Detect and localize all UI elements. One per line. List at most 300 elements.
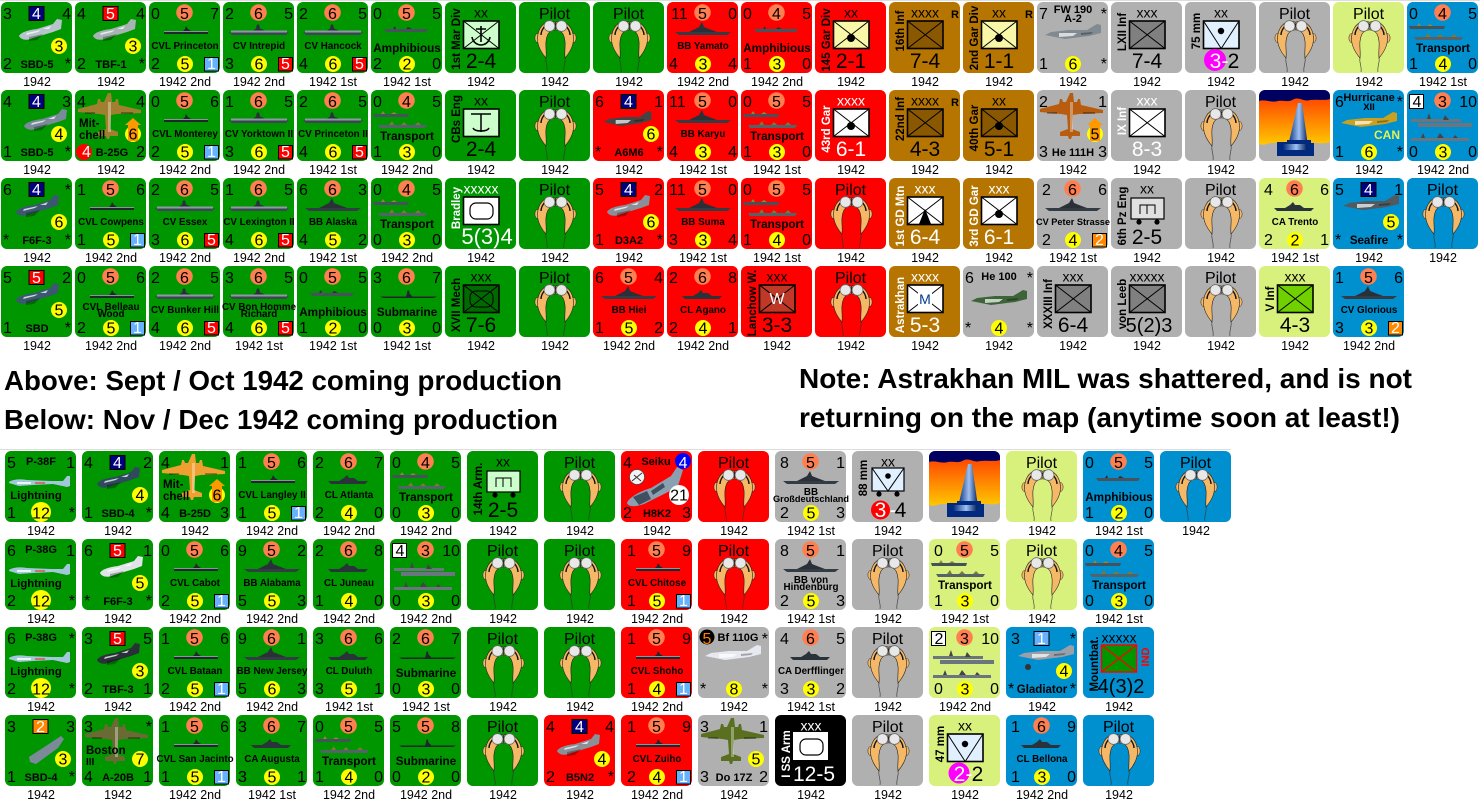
counter: Pilot blue: 1942 [1105, 788, 1133, 802]
counter: Transport large: 3 [421, 543, 430, 560]
counter: Mountbat.: 4(3)2 [1098, 676, 1144, 698]
counter: Amphibious: Amphibious [299, 306, 367, 319]
counter: CL Atlanta: 6 [344, 455, 353, 472]
counter: BB Suma [667, 178, 738, 265]
counter: P-38F Lightning: 1942 [27, 524, 55, 538]
counter: FW 190 A-2: 7 [1039, 6, 1048, 23]
counter: 145 Gar Div [815, 2, 886, 89]
icon: ships [1411, 113, 1472, 141]
counter: BB Grossdeutschland: 5 [806, 455, 815, 472]
counter: P-38F Lightning: 12 [32, 506, 50, 522]
counter: Submarine: 0 [392, 769, 401, 786]
counter: Amphibious blue: 5 [1114, 455, 1123, 472]
counter: Pilot green [544, 451, 615, 538]
counter: Amphibious blue: 2 [1115, 506, 1124, 522]
counter: CVL Belleau Wood: 5 [106, 270, 115, 287]
counter: CV Glorious: 6 [1394, 270, 1403, 287]
counter: TBF-3: TBF-3 [102, 684, 134, 696]
counter: CA Derfflinger: 5 [836, 631, 845, 648]
counter: Mitchell B-25D: Mit- [163, 479, 184, 491]
icon: ship [675, 22, 731, 35]
counter: Mitchell B-25D [159, 451, 230, 538]
counter: SBD-4: 4 [113, 455, 122, 472]
counter: CV Hancock: 6 [328, 6, 337, 23]
counter: Transport blue large: 0 [1409, 144, 1418, 161]
counter: BB Karyu: 4 [728, 144, 737, 161]
counter: D3A2: 5 [595, 182, 604, 199]
icon: ship [754, 26, 798, 32]
counter: CVL Bataan: 1 [161, 631, 170, 648]
counter: 3rd GD Gar [963, 178, 1034, 265]
counter: CV Lexington II: 1 [225, 182, 234, 199]
counter: TBF-3: 3 [84, 631, 93, 648]
counter: CVL Cowpens: 1 [77, 232, 86, 249]
counter: SBD-4: 3 [7, 719, 16, 736]
counter: SBD: SBD [25, 323, 49, 335]
counter: CVL Langley II: 1942 2nd [246, 524, 298, 538]
counter: Pilot blue: 1942 [1182, 524, 1210, 538]
counter: 22nd Inf: 4-3 [910, 138, 940, 161]
counter: FW 190 A-2: A-2 [1064, 13, 1082, 25]
counter: 1st GD Mtn: 6-4 [910, 226, 940, 249]
counter: CA Augusta [236, 715, 307, 802]
counter: BB Alabama: 5 [268, 594, 277, 610]
counter: He 100: 1942 [985, 339, 1013, 353]
counter: BB Karyu: 0 [728, 94, 737, 111]
counter: Pilot gray: 1942 [1207, 163, 1235, 177]
counter: TBF-3 [82, 627, 153, 714]
counter: BB Suma: 0 [728, 182, 737, 199]
icon: plane [97, 467, 140, 489]
counter: Pilot green: Pilot [487, 543, 519, 560]
icon: pilot [483, 646, 524, 697]
counter: Pilot gray [1185, 178, 1256, 265]
counter: CVL Princeton: 5 [181, 56, 190, 74]
counter: Transport: 4 [402, 182, 411, 199]
counter: CVL Cowpens: 1 [77, 182, 86, 199]
counter: Submarine [390, 715, 461, 802]
counter: Gladiator: 3 [1011, 631, 1020, 648]
counter: CL Agano: 8 [728, 270, 737, 287]
counter: BB Suma: 3 [669, 232, 678, 249]
counter: Transport large: 10 [442, 543, 460, 560]
counter: CV Yorktown II: 6 [254, 94, 263, 111]
counter: TBF-3: 2 [84, 681, 93, 698]
counter: Transport: 0 [373, 94, 382, 111]
counter: Pilot blue: Pilot [1180, 455, 1212, 472]
counter: BB Yamato: 0 [728, 6, 737, 23]
counter: Submarine: 2 [422, 770, 431, 786]
counter: SBD-5: 4 [55, 126, 64, 144]
counter: He 100 [963, 266, 1034, 353]
counter: TBF-1: 5 [106, 6, 115, 23]
counter: FW 190 A-2 [1037, 2, 1108, 89]
counter: CV Bon Homme Richard: 6 [255, 320, 264, 338]
icon: plane [604, 111, 651, 126]
counter: CV Essex: 2 [151, 182, 160, 199]
counter: Pilot green [519, 2, 590, 89]
counter: Transport blue [1407, 2, 1478, 89]
counter: Pilot green [519, 266, 590, 353]
counter: CV Peter Strasse: 2 [1042, 232, 1051, 249]
counter: Transport red: Transport [750, 130, 804, 143]
counter: V Inf [1259, 266, 1330, 353]
counter: Transport lime: 3 [961, 594, 970, 610]
counter: Bf 110G: * [762, 631, 768, 648]
counter: Amphibious red: Amphibious [743, 42, 811, 55]
counter: 22nd Inf: 22nd Inf [895, 97, 907, 141]
counter: CL Duluth: 1942 1st [325, 700, 373, 714]
icon: ship [229, 288, 289, 299]
counter: Transport: 1 [373, 144, 382, 161]
counter: CV Lexington II: 4 [225, 232, 234, 249]
counter: Transport: Transport [322, 755, 376, 768]
icon: pilot [1176, 470, 1217, 521]
counter: Transport: 4 [402, 94, 411, 111]
counter: CV Bon Homme Richard: CV Bon Homme [222, 302, 297, 313]
counter: Transport blue: 4 [1438, 6, 1447, 23]
counter: D3A2: 4 [624, 182, 633, 199]
counter: CV Hancock: 5 [355, 56, 364, 73]
counter: Mitchell B-25D: chell [163, 491, 189, 503]
counter: Transport blue: 0 [1085, 543, 1094, 560]
counter: CA Augusta: 6 [267, 719, 276, 736]
counter: B5N2: 4 [546, 719, 555, 736]
counter: Pilot green: Pilot [487, 631, 519, 648]
counter: Pilot green: Pilot [539, 270, 571, 287]
icon: ship [1096, 475, 1140, 481]
counter: CV Glorious: 3 [1335, 320, 1344, 337]
counter: A6M6: * [595, 144, 601, 161]
counter: XVII Mech: XVII Mech [451, 278, 463, 332]
counter: CV Glorious: 3 [1365, 320, 1374, 338]
counter: 16th Inf [889, 2, 960, 89]
counter: CV Essex: 5 [210, 182, 219, 199]
counter: F6F-3: 5 [136, 576, 145, 592]
counter: Do 17Z: 5 [752, 752, 761, 768]
counter: SBD [1, 266, 72, 353]
icon: unit box [982, 109, 1017, 136]
counter: Pilot green [544, 627, 615, 714]
counter: 1st GD Mtn [889, 178, 960, 265]
counter: CL Duluth: 3 [315, 631, 324, 648]
counter: CV Glorious: 2 [1391, 320, 1400, 337]
counter: 3rd GD Gar: 6-1 [984, 226, 1014, 249]
icon: unit box [834, 109, 869, 136]
counter: BB Karyu: 3 [699, 144, 708, 162]
counter: CV Princeton II: 6 [328, 94, 337, 111]
counter: 2nd Gar Div: 1942 [985, 75, 1013, 89]
counter: CV Peter Strasse: CV Peter Strasse [1036, 217, 1110, 227]
counter: CV Princeton II: CV Princeton II [298, 129, 368, 140]
counter: CV Princeton II: 5 [355, 144, 364, 161]
counter: CV Hancock: 4 [299, 56, 308, 73]
counter: He 100: * [965, 320, 971, 337]
icon: unit box [1056, 285, 1091, 312]
counter: 40th Gar: 5-1 [984, 138, 1014, 161]
counter: BB Suma: 3 [699, 232, 708, 250]
icon: pilot [560, 470, 601, 521]
counter: CV Yorktown II: 5 [284, 94, 293, 111]
counter: Pilot green: 1942 [615, 75, 643, 89]
counter: Lanchow W.: 1942 [763, 339, 791, 353]
counter: CA Trento: 6 [1290, 182, 1299, 199]
counter: Amphibious red: 0 [802, 56, 811, 73]
counter: Transport blue: 1 [1409, 56, 1418, 73]
counter: CVL Zuiho: 1942 2nd [631, 788, 683, 802]
counter: CL Agano: 4 [699, 320, 708, 338]
counter: 16th Inf: 7-4 [910, 50, 940, 73]
counter: SBD-4: 1942 [27, 788, 55, 802]
counter: Transport: 0 [432, 232, 441, 249]
counter: CL Bellona: 1 [1011, 719, 1020, 736]
counter: CV Glorious: 1 [1335, 270, 1344, 287]
counter: CA Augusta: 1942 1st [248, 788, 296, 802]
counter: Mountbat. [1083, 627, 1154, 714]
counter: Transport: 1942 2nd [323, 788, 375, 802]
counter: F6F-3: * [65, 232, 71, 249]
counter: Astrakhan [889, 266, 960, 353]
counter: Transport lime large: 0 [934, 681, 943, 698]
counter: F6F-3: 5 [113, 543, 122, 560]
icon: unit box [908, 21, 943, 48]
counter: Hurricane XII: CAN [1374, 128, 1400, 142]
counter: F6F-3: * [146, 593, 152, 610]
counter: BB Hiei: 2 [654, 320, 663, 337]
icon: unit box [464, 285, 499, 312]
icon: bomber [85, 718, 148, 764]
counter: CV Essex [149, 178, 220, 265]
counter: I SS Arm: 12-5 [793, 763, 835, 786]
counter: Submarine: 7 [432, 270, 441, 287]
counter: Mitchell B-25G: 4 [136, 94, 145, 111]
counter: F6F-3: 1942 [104, 612, 132, 626]
counter: CVL Chitose: 1942 2nd [631, 612, 683, 626]
counter: CVL Bataan: 1942 2nd [169, 700, 221, 714]
counter: Seiku H8K2: 1942 [643, 524, 671, 538]
icon: ship [90, 202, 134, 210]
counter: SBD-4: 4 [136, 488, 145, 504]
counter: CV Hancock: 6 [329, 56, 338, 74]
counter: 3rd GD Gar: 1942 [985, 251, 1013, 265]
counter: SBD-5: 2 [3, 56, 12, 73]
counter: BB Alaska: 5 [329, 232, 338, 250]
icon: ship [229, 200, 289, 211]
counter: Amphibious blue: 1 [1085, 505, 1094, 522]
counter: Transport blue large: 3 [1438, 94, 1447, 111]
counter: Pilot gray [1259, 2, 1330, 89]
counter: BB Yamato: 1942 2nd [677, 75, 729, 89]
counter: CVL San Jacinto: 5 [191, 770, 200, 786]
counter: 88 mm: - [890, 499, 896, 522]
icon: unit box [982, 21, 1017, 48]
counter: V Inf: V Inf [1265, 286, 1277, 311]
counter: CV Bunker Hill: 5 [207, 320, 216, 337]
counter: B5N2: B5N2 [566, 772, 594, 784]
counter: Boston III: 1942 [104, 788, 132, 802]
counter: Amphibious: 1942 1st [309, 339, 357, 353]
counter: Hurricane XII: XII [1363, 102, 1375, 113]
counter: CV Yorktown II: 6 [255, 144, 264, 162]
counter: CVL Shoho: 1942 2nd [631, 700, 683, 714]
counter: I SS Arm: I SS Arm [781, 730, 793, 778]
counter: Transport lime: 0 [990, 593, 999, 610]
counter: SBD-4: SBD-4 [24, 772, 58, 784]
counter: P-38F Lightning: Lightning [10, 490, 62, 502]
counter: 22nd Inf: 1942 [911, 163, 939, 177]
counter: Transport blue: 0 [1085, 593, 1094, 610]
counter: 1st GD Mtn: 1942 [911, 251, 939, 265]
counter: SBD-4: SBD-4 [101, 508, 135, 520]
counter: SBD-5 [1, 90, 72, 177]
counter: CL Atlanta: 7 [374, 455, 383, 472]
counter: Transport blue [1083, 539, 1154, 626]
counter: 145 Gar Div: 2-1 [836, 50, 866, 73]
counter: CA Trento: 1942 1st [1271, 251, 1319, 265]
icon: ships [933, 650, 994, 678]
icon: ships [373, 199, 427, 216]
counter: BB Alaska: 3 [358, 182, 367, 199]
counter: CVL Cabot: 2 [161, 593, 170, 610]
counter: CA Augusta: CA Augusta [244, 754, 300, 765]
counter: CL Duluth [313, 627, 384, 714]
panel: Nov / Dec 1942 counters [5, 451, 1231, 802]
counter: CA Augusta: 3 [238, 769, 247, 786]
icon: plane [705, 645, 761, 660]
counter: Mitchell B-25D: 6 [213, 488, 222, 504]
icon: plane [1018, 645, 1074, 670]
counter: CV Intrepid: CV Intrepid [233, 41, 285, 52]
icon: ship [328, 475, 368, 484]
icon: ship [384, 26, 428, 32]
counter: CVL Shoho: 9 [682, 631, 691, 648]
icon: plane [627, 467, 683, 506]
counter: 47 mm [929, 715, 1000, 802]
icon: plane [9, 652, 70, 663]
counter: D3A2: 1 [595, 232, 604, 249]
counter: von Leeb: von Leeb [1117, 279, 1129, 329]
counter: CV Princeton II: 4 [299, 144, 308, 161]
counter: B5N2: 4 [598, 752, 607, 768]
icon: pilot [560, 646, 601, 697]
icon: pilot [1201, 197, 1242, 248]
counter: P-38G Lightning: * [69, 593, 75, 610]
counter: Transport: 0 [315, 719, 324, 736]
counter: CV Lexington II: 5 [284, 182, 293, 199]
counter: P-38F Lightning: 5 [7, 455, 16, 472]
icon: pilot [868, 734, 909, 785]
counter: CL Bellona: 6 [1037, 719, 1046, 736]
counter: Transport: 1942 2nd [381, 163, 433, 177]
counter: Seafire: * [1397, 232, 1403, 249]
counter: 88 mm: 88 mm [858, 460, 870, 496]
counter: Transport red: 5 [772, 94, 781, 111]
counter: CVL Bataan: 5 [191, 682, 200, 698]
counter: Do 17Z [698, 715, 769, 802]
counter: BB Alaska [297, 178, 368, 265]
counter: von Leeb: 1942 [1133, 339, 1161, 353]
counter: BB Hiei: 5 [624, 270, 633, 287]
icon: plane [1343, 195, 1399, 210]
counter: BB Karyu: 11 [669, 94, 686, 111]
counter: Hurricane XII: Hurricane [1343, 92, 1395, 104]
counter: Pilot gray [1185, 266, 1256, 353]
icon: unit box [1130, 285, 1165, 312]
counter: Mountbat.: IND [1140, 647, 1152, 666]
counter: BB Suma: 1942 1st [679, 251, 727, 265]
counter: LXII Inf: 7-4 [1132, 50, 1162, 73]
counter: 1st Mar Div: 1st Mar Div [451, 8, 463, 70]
counter: 1st Mar Div: 2-4 [466, 50, 496, 73]
counter: Boston III: * [146, 719, 152, 736]
counter: Transport: 5 [374, 719, 383, 736]
counter: Pilot red [698, 451, 769, 538]
counter: CVL Cowpens: 5 [106, 182, 115, 199]
counter: XXXIII Inf [1037, 266, 1108, 353]
counter: Seafire: 1 [1394, 182, 1403, 199]
counter: CL Atlanta: 4 [345, 506, 354, 522]
counter: 2nd Gar Div: 1-1 [984, 50, 1014, 73]
counter: Pilot lime [1333, 2, 1404, 89]
counter: 2nd Gar Div: R [1025, 9, 1033, 21]
icon: ship [174, 739, 218, 747]
icon: ship [303, 112, 363, 123]
counter: P-38F Lightning: P-38F [26, 456, 56, 468]
counter: Transport [371, 90, 442, 177]
counter: CVL Belleau Wood: Wood [97, 309, 125, 320]
counter: CVL Monterey: 5 [180, 94, 189, 111]
icon: ships [392, 472, 446, 489]
counter: Hurricane XII: 6 [1335, 94, 1344, 111]
counter: 47 mm: 2 [972, 763, 983, 786]
counter: TBF-1: 2 [77, 56, 86, 73]
counter: SBD-4: 3 [66, 719, 75, 736]
counter: Transport [371, 178, 442, 265]
counter: BB Alabama: 9 [238, 543, 247, 560]
counter: Amphibious: 0 [432, 56, 441, 73]
counter: Submarine: 1942 2nd [400, 788, 452, 802]
counter: CV Peter Strasse: 2 [1042, 182, 1051, 199]
counter: CVL San Jacinto: 1 [161, 719, 170, 736]
counter: CVL Bataan: 5 [190, 631, 199, 648]
counter: Transport red: 1 [743, 144, 752, 161]
counter: CVL Langley II: 6 [297, 455, 306, 472]
icon: bomber [162, 454, 225, 500]
counter: BB New Jersey [236, 627, 308, 714]
counter: Submarine: 5 [421, 719, 430, 736]
counter: 6th Pz Eng: xx [1140, 180, 1154, 196]
counter: BB von Hindenburg: 5 [806, 543, 815, 560]
counter: CA Augusta: 3 [238, 719, 247, 736]
counter: CL Atlanta: 2 [315, 505, 324, 522]
icon: pilot [1201, 109, 1242, 160]
counter: 6th Pz Eng [1111, 178, 1182, 265]
counter: Do 17Z: 1942 [720, 788, 748, 802]
counter: Mitchell B-25G: Mit- [79, 118, 100, 130]
counter: Amphibious: 5 [328, 270, 337, 287]
counter: FW 190 A-2: * [1101, 56, 1107, 73]
counter: CVL Chitose: 9 [682, 543, 691, 560]
counter: CV Princeton II [297, 90, 368, 177]
icon: ship [1341, 286, 1397, 299]
counter: Transport large: 0 [451, 593, 460, 610]
counter: He 111H [1037, 90, 1108, 177]
counter: Submarine: 3 [373, 270, 382, 287]
counter: He 111H: 2 [1039, 94, 1048, 111]
counter: BB Grossdeutschland: 8 [780, 455, 789, 472]
counter: CL Bellona: 1 [1011, 769, 1020, 786]
counter: CVL Belleau Wood: 1 [133, 320, 142, 337]
